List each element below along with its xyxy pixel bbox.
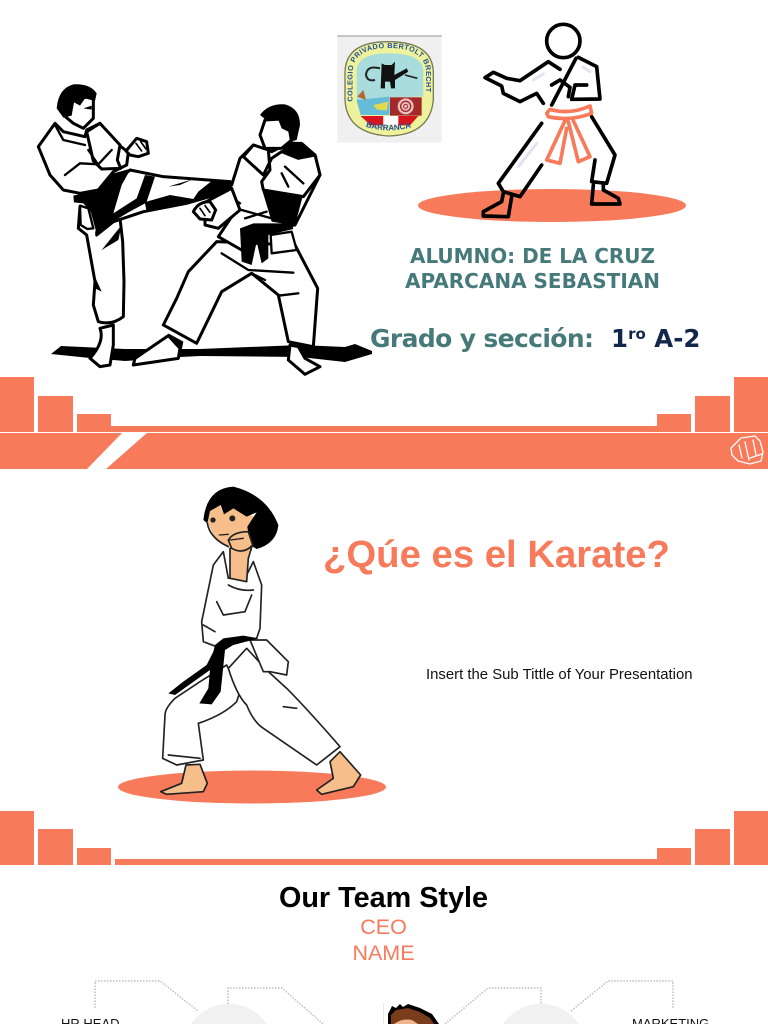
text: student surname: APARCANA SEBASTIAN — [405, 269, 660, 293]
illustration: thinking karate girl — [161, 487, 361, 794]
chart: dotted connector lines — [95, 981, 673, 1024]
text: student name: ALUMNO: DE LA CRUZ — [410, 244, 655, 268]
logo: school crest: BARRANCA — [366, 122, 411, 130]
icon: coral ground ellipse — [118, 770, 386, 804]
banner: stepped coral bars bottom — [0, 811, 768, 865]
text: CEO role: CEO — [360, 915, 407, 939]
icon: coral ground ellipse — [418, 189, 686, 222]
text: subtitle: Insert the Sub Tittle of Your Presentation — [426, 667, 693, 683]
text: grade and section value: 1 — [611, 324, 628, 353]
heading: our team style: Our Team Style — [279, 882, 488, 914]
icon: white fist — [731, 436, 763, 464]
text: grade and section value: ro — [628, 325, 646, 343]
avatar: left grey circle — [191, 1004, 267, 1024]
logo: school crest: COLEGIO PRIVADO BERTOLT BRECHT — [348, 43, 431, 102]
illustration: line-art karateka with coral belt — [483, 24, 620, 217]
banner: stepped coral bars top — [0, 377, 768, 432]
heading: what is karate: ¿Qúe es el Karate? — [323, 533, 670, 576]
banner: coral band with slash — [0, 433, 768, 469]
logo: school crest — [337, 35, 442, 142]
text: grade and section label: Grado y sección: — [370, 324, 594, 353]
avatar: CEO head — [383, 1003, 439, 1024]
text: CEO name: NAME — [352, 941, 415, 965]
text: grade and section value: A-2 — [646, 324, 700, 353]
illustration: two karate fighters kicking — [38, 84, 372, 374]
avatar: right grey circle — [503, 1004, 579, 1024]
